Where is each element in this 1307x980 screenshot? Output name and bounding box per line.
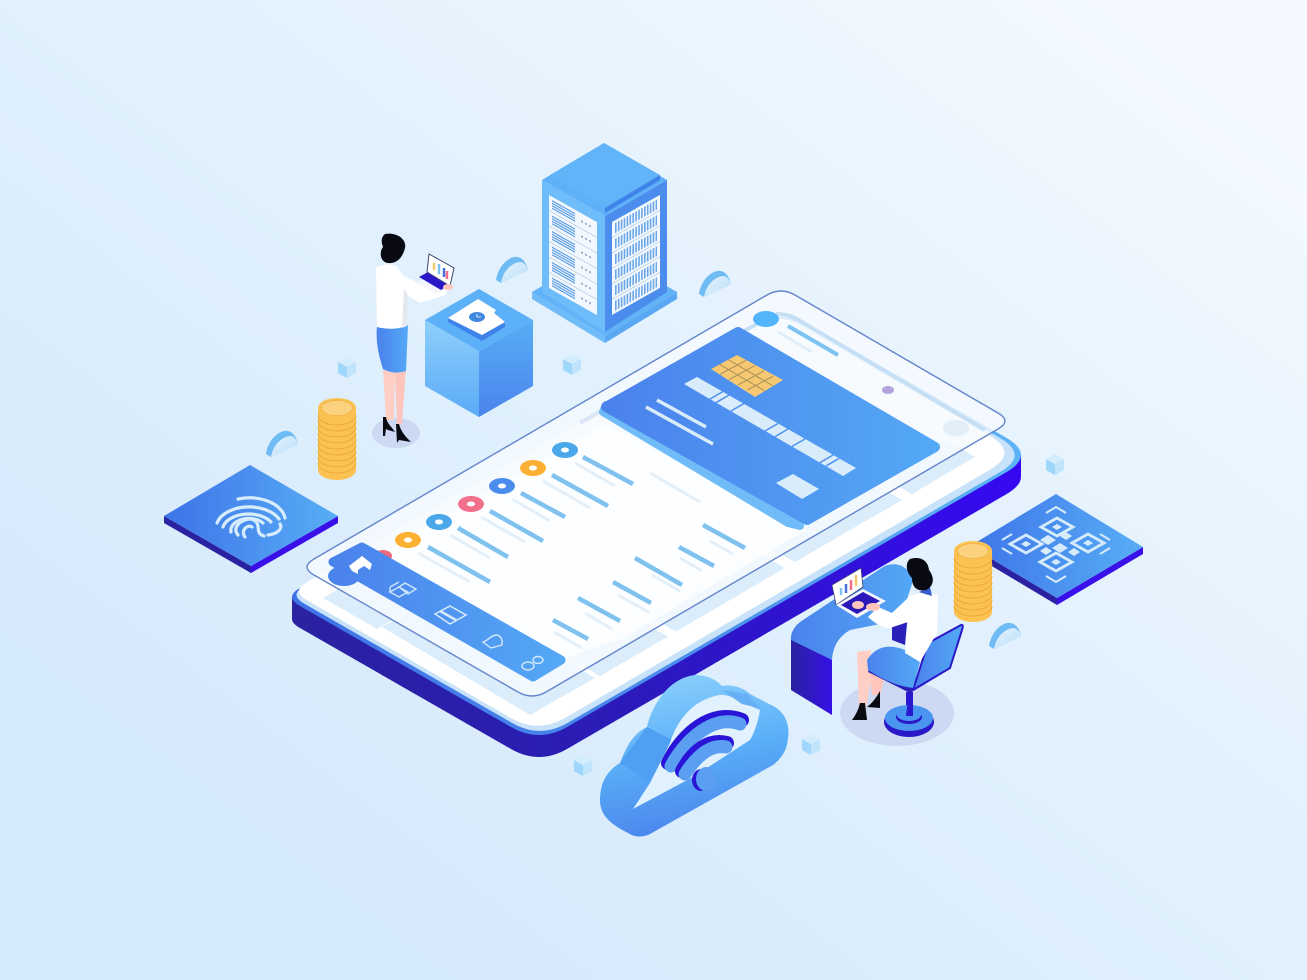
panel: credit card [603, 332, 935, 526]
legs [857, 650, 871, 708]
icon: people [522, 656, 543, 670]
blouse with arm [868, 592, 938, 662]
icon: card outline [435, 606, 466, 624]
cube: left [338, 357, 356, 378]
figure: seated woman at desk [791, 558, 963, 746]
card CVV box [776, 474, 819, 499]
dome: near phone top [699, 271, 731, 297]
hair [381, 234, 405, 263]
wifi waves [668, 717, 742, 774]
panel: navigation bar [328, 547, 561, 677]
list row: transaction bars and dots [395, 442, 745, 648]
cube: by cloud right [802, 734, 820, 755]
white list sheet [370, 424, 806, 665]
decorative domes [266, 257, 1021, 649]
laptop on desk [832, 568, 886, 618]
icon: cube with document [425, 289, 533, 417]
icon: fingerprint tile [164, 465, 338, 573]
icon: right coin stack [954, 541, 992, 622]
icon: QR code tile [970, 494, 1143, 605]
phone screen [297, 319, 1015, 731]
card holder lines [657, 400, 706, 427]
top bar [744, 311, 985, 436]
skirt [377, 325, 408, 373]
panel: phone body [292, 317, 1021, 757]
icon: wifi cloud [600, 675, 788, 837]
dome: near fingerprint [266, 431, 298, 457]
server right panel [612, 195, 660, 315]
phone side wall [292, 339, 1021, 757]
dome: near right coins [989, 623, 1021, 649]
shoes [383, 417, 395, 436]
icon: wallet outline [390, 582, 416, 597]
figure: standing woman with laptop [372, 234, 454, 448]
blouse and arm [376, 264, 447, 329]
icon: home [349, 556, 372, 574]
skirt [867, 647, 920, 688]
card chip [711, 355, 783, 397]
screen content blocks [323, 440, 975, 715]
seat back under arm [892, 612, 908, 645]
chair [868, 625, 963, 737]
cube: by cloud left [574, 755, 592, 776]
legs [383, 368, 395, 420]
panel: glass app screen [307, 291, 1005, 696]
hair [907, 558, 933, 590]
cube: centre [563, 354, 581, 375]
card number strip [684, 377, 856, 476]
icon: left coin stack [318, 398, 356, 480]
shoes [852, 703, 867, 720]
laptop [415, 276, 451, 294]
icon: server rack [532, 143, 677, 343]
desk [791, 564, 915, 715]
dome: near cube [496, 257, 528, 283]
icon: bell [483, 635, 502, 648]
lavender accent [580, 406, 610, 423]
cube: right [1046, 454, 1064, 475]
server left panel [549, 195, 597, 315]
phone rim [292, 317, 1021, 735]
decorative cubes [338, 354, 1064, 776]
